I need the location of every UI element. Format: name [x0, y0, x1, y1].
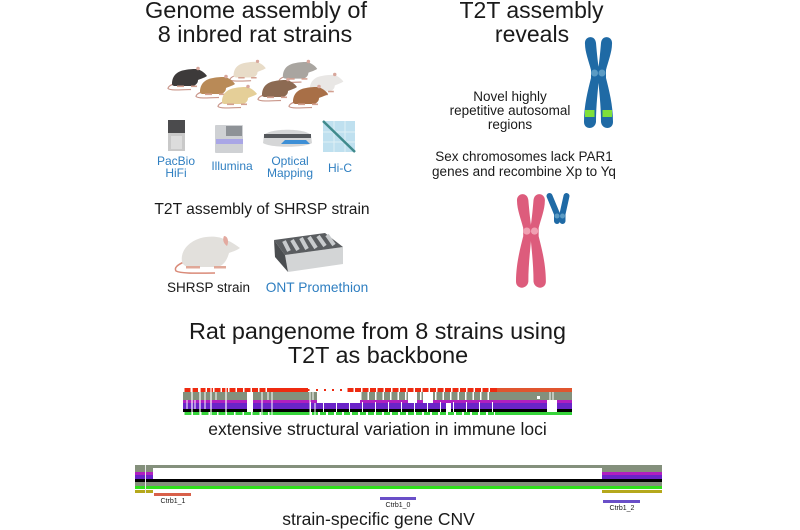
- text: sex chromosomes: Sex chromosomes lack PAR1: [435, 149, 613, 164]
- icon: PacBio instrument: [168, 120, 185, 151]
- text: novel repetitive regions: regions: [488, 117, 532, 132]
- caption: gene CNV: strain-specific gene CNV: [282, 509, 475, 529]
- gene marker: Ctrb1_1: [154, 493, 191, 505]
- label: PacBio HiFi: PacBio: [157, 154, 195, 168]
- title: T2T assembly reveals: [459, 0, 604, 47]
- title: genome assembly: [145, 0, 367, 47]
- icon: ONT Promethion: [274, 233, 343, 272]
- label: Optical Mapping: Optical: [271, 154, 309, 168]
- label: Optical Mapping: Mapping: [267, 166, 313, 180]
- icon: optical mapping instrument: [263, 130, 312, 147]
- label: Hi-C: Hi-C: [328, 161, 352, 175]
- icon: Illumina instrument: [215, 125, 243, 153]
- chart: immune loci alignment tracks: [183, 388, 572, 415]
- gene marker: Ctrb1_0: Ctrb1_0: [386, 502, 411, 509]
- label: ONT Promethion: ONT Promethion: [266, 280, 368, 295]
- gene marker: Ctrb1_1: Ctrb1_1: [161, 498, 186, 505]
- gene marker: Ctrb1_2: Ctrb1_2: [610, 505, 635, 512]
- icon: Hi-C contact map: [323, 121, 355, 152]
- heading: rat pangenome: Rat pangenome from 8 strains using: [189, 318, 566, 344]
- icon: SHRSP rat: [175, 236, 240, 273]
- gene marker: Ctrb1_0: [380, 497, 416, 509]
- chart: gene CNV alignment tracks: [135, 465, 662, 493]
- heading: T2T assembly of SHRSP strain: T2T assembly of SHRSP strain: [154, 201, 370, 218]
- text: sex chromosomes: genes and recombine Xp to Yq: [432, 164, 616, 179]
- icon: autosomal chromosome: [584, 37, 613, 128]
- heading: rat pangenome: T2T as backbone: [288, 342, 468, 368]
- title: genome assembly: 8 inbred rat strains: [158, 21, 352, 47]
- label: Illumina: Illumina: [211, 159, 253, 173]
- text: novel repetitive regions: repetitive autosomal: [450, 103, 570, 118]
- icon: X chromosome: [516, 194, 546, 288]
- gene marker: Ctrb1_2: [603, 500, 640, 512]
- label: PacBio HiFi: HiFi: [165, 166, 187, 180]
- title: T2T assembly reveals: reveals: [495, 21, 569, 47]
- icon: Y chromosome: [550, 196, 566, 221]
- text: novel repetitive regions: Novel highly: [473, 89, 547, 104]
- label: SHRSP strain: SHRSP strain: [167, 280, 250, 295]
- caption: structural variation: extensive structural variation in immune loci: [208, 419, 547, 439]
- icon group: eight rat strains: [168, 60, 343, 108]
- heading: rat pangenome: [189, 318, 566, 368]
